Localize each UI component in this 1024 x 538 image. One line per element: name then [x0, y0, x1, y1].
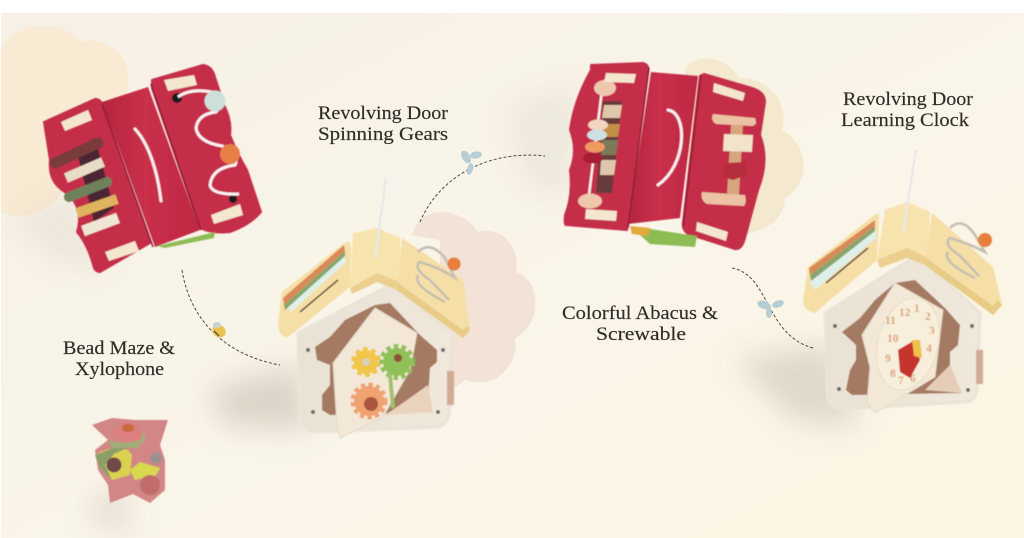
- xylophone on roof: [809, 222, 876, 290]
- orange gear: [354, 386, 384, 416]
- label plates: [61, 110, 92, 131]
- dashed arrow: house to abacus panel: [420, 155, 545, 222]
- xylophone on roof: [283, 245, 346, 312]
- clock numbers: 7: [898, 375, 904, 387]
- right red panel: [683, 74, 765, 249]
- clock numbers: 6: [910, 373, 916, 385]
- label: learning clock: Revolving Door: [843, 89, 974, 110]
- clock numbers: 1: [914, 303, 920, 315]
- plates: [713, 83, 745, 101]
- label: spinning gears: Revolving Door: [318, 103, 449, 124]
- clock numbers: 8: [890, 368, 896, 380]
- abacus window: [596, 101, 622, 193]
- dashed arrow: xylophone to house: [182, 270, 280, 365]
- label: bead maze and xylophone: [63, 338, 175, 380]
- dashed arrow: screw panel to clock house: [732, 268, 813, 348]
- plates: [604, 73, 636, 83]
- label: learning clock: [841, 89, 974, 131]
- house 2 with clock door: [803, 202, 1002, 413]
- toy: red panels with abacus and screw: [565, 63, 765, 249]
- label: abacus and screwable: Colorful Abacus &: [562, 303, 718, 324]
- label: spinning gears: Spinning Gears: [318, 124, 448, 145]
- label: bead maze and xylophone: Bead Maze &: [63, 338, 175, 359]
- wall: [298, 285, 452, 432]
- panel seams: [628, 68, 701, 228]
- label: bead maze and xylophone: Xylophone: [75, 359, 164, 380]
- wire maze: [417, 247, 455, 302]
- gears peek: [157, 232, 215, 248]
- label: learning clock: Learning Clock: [841, 110, 970, 131]
- green gear: [383, 348, 411, 376]
- screw: [702, 114, 756, 206]
- panel seams: [102, 84, 201, 247]
- centre roof: [350, 228, 400, 288]
- abacus rod and beads: [578, 80, 616, 208]
- label: abacus and screwable: [562, 303, 718, 345]
- opening: [315, 303, 437, 415]
- white ribbon 1: [375, 178, 386, 258]
- white ribbon 2: [903, 150, 916, 232]
- clock numbers: [885, 303, 935, 387]
- flower: yellow right: [685, 58, 803, 234]
- icon: bee: [210, 322, 228, 340]
- right red panel: [152, 65, 261, 232]
- left roof: [278, 242, 351, 338]
- yellow gear: [355, 351, 377, 373]
- soft shadows: [15, 85, 860, 530]
- clock numbers: 2: [925, 311, 931, 323]
- opening: [842, 280, 962, 395]
- clock door: [862, 283, 949, 413]
- xylophone: [55, 138, 118, 231]
- side bead block: [976, 350, 983, 384]
- distorted shape sorter block: [92, 418, 168, 503]
- wire maze: [947, 223, 985, 278]
- side bead block: [447, 371, 454, 405]
- white handle: [658, 110, 682, 185]
- clock numbers: 10: [887, 333, 899, 345]
- centre red panel: [628, 72, 698, 224]
- label: spinning gears: [318, 103, 449, 145]
- screws: [833, 324, 974, 392]
- door with gears: [333, 308, 417, 438]
- house 1 with gear door: [278, 228, 470, 438]
- screws: [306, 348, 445, 414]
- left red panel: [565, 63, 648, 230]
- clock numbers: 9: [885, 353, 891, 365]
- bird: [898, 340, 920, 378]
- wall: [825, 255, 980, 409]
- icon: blue butterfly 1: [459, 149, 483, 176]
- flower: pink middle: [412, 212, 535, 389]
- clock numbers: 3: [929, 325, 935, 337]
- clock numbers: 11: [885, 315, 896, 327]
- left red panel: [44, 99, 150, 272]
- icon: blue butterfly 2: [756, 299, 785, 318]
- flower: pale orange left: [1, 26, 128, 216]
- centre red panel: [102, 87, 200, 247]
- white handle: [135, 129, 161, 201]
- label: abacus and screwable: Screwable: [596, 324, 686, 345]
- right roof: [925, 213, 1002, 315]
- toy: open red panels with xylophone and bead maze: [44, 65, 261, 272]
- left roof: [803, 214, 879, 313]
- centre roof: [877, 202, 930, 260]
- clock face: [867, 291, 949, 397]
- gears peek: [630, 226, 697, 247]
- clock numbers: 12: [899, 307, 911, 319]
- right roof: [397, 238, 470, 338]
- clock numbers: 4: [926, 343, 932, 355]
- plates and maze: [164, 75, 197, 91]
